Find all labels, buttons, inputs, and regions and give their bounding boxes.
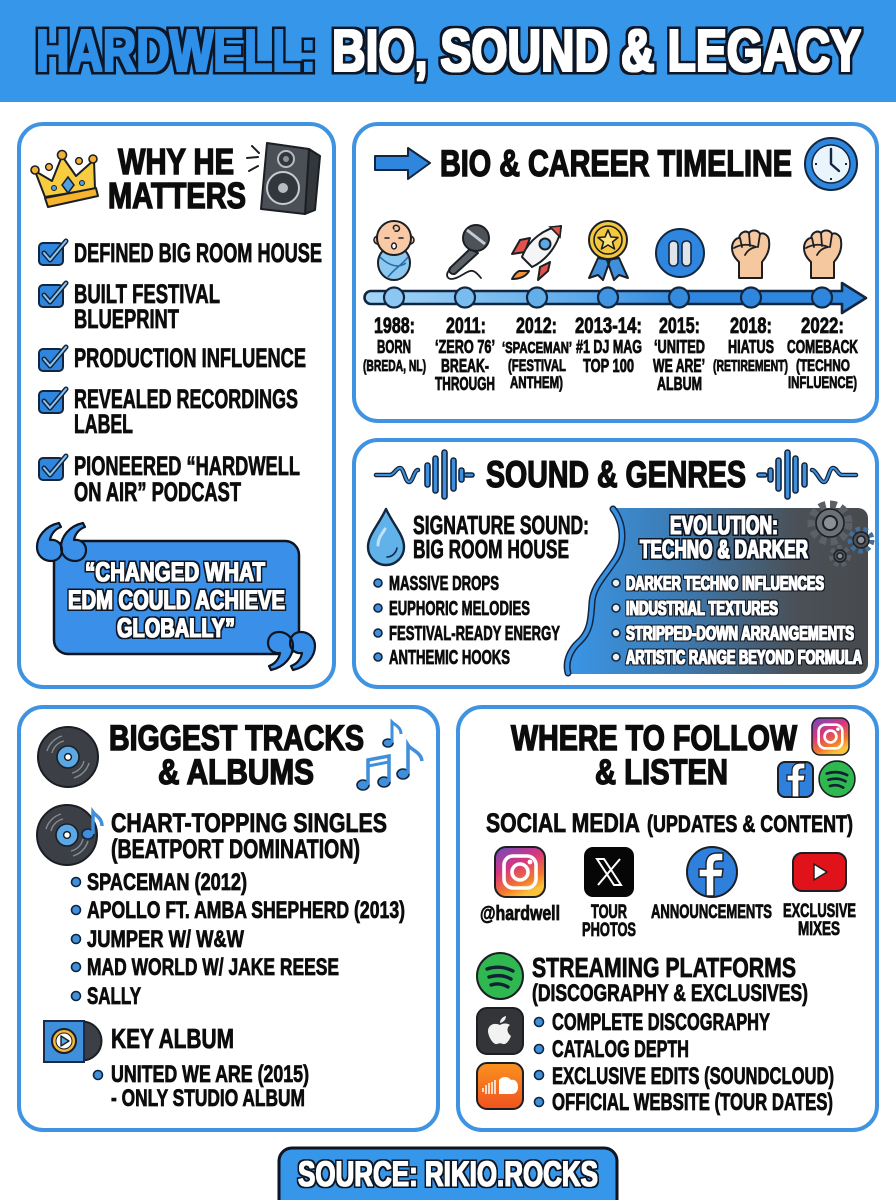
- item: built festival blueprint: BUILT FESTIVAL: [74, 279, 220, 309]
- album detail: UNITED WE ARE (2015): [111, 1061, 309, 1088]
- milestone: 2012: 2012:: [516, 313, 557, 338]
- icon: vinyl record: [38, 727, 98, 787]
- milestone: 2022: [787, 313, 858, 392]
- icon: left waveform: [376, 450, 474, 499]
- icon: award medal: [589, 221, 628, 280]
- social: facebook: ANNOUNCEMENTS: [651, 902, 772, 923]
- icon: music notes: [357, 722, 422, 790]
- milestone: 2015: WE ARE’: [653, 356, 705, 376]
- callout: quote: [37, 523, 315, 670]
- footer source badge: SOURCE: RIKIO.ROCKS: [298, 1155, 598, 1194]
- icon: vinyl with note: [37, 805, 102, 865]
- milestone: 2022: (TECHNO: [796, 356, 850, 375]
- milestone: 2013-14: [575, 313, 642, 376]
- subheading: social media: SOCIAL MEDIA: [486, 808, 640, 838]
- milestone: 1988: BORN: [377, 337, 411, 357]
- heading: where to follow: [511, 719, 797, 792]
- panel: where to follow and listen: [458, 707, 877, 1130]
- signature sound heading: SIGNATURE SOUND:: [413, 510, 589, 540]
- callout: quote: GLOBALLY”: [117, 613, 235, 643]
- item: pioneered hardwell on air podcast: PIONEERED “HARDWELL: [74, 451, 300, 481]
- item: production influence: [39, 343, 306, 373]
- icon: speaker: [247, 143, 320, 214]
- subheading: chart-topping singles: (BEATPORT DOMINATION): [111, 834, 360, 864]
- icon: small instagram: [812, 718, 849, 755]
- subheading: key album: KEY ALBUM: [111, 1023, 234, 1054]
- panel: biggest tracks and albums: [19, 707, 438, 1130]
- signature sound heading: [413, 510, 589, 564]
- album detail: [94, 1061, 309, 1112]
- icon: right waveform: [757, 450, 856, 499]
- milestone: 2012: ‘SPACEMAN’: [502, 340, 572, 357]
- social: youtube: EXCLUSIVE: [783, 901, 856, 922]
- signature sound list: FESTIVAL-READY ENERGY: [389, 623, 560, 645]
- icon: crown: [31, 150, 98, 207]
- milestone: 2013-14: 2013-14:: [575, 313, 642, 338]
- panel: why he matters: [19, 124, 334, 687]
- streaming list: COMPLETE DISCOGRAPHY: [552, 1009, 770, 1036]
- item: revealed recordings label: LABEL: [74, 409, 133, 439]
- milestone: 2013-14: TOP 100: [583, 356, 634, 376]
- milestone: 2018: [713, 313, 788, 375]
- milestone: 2015: [653, 313, 705, 394]
- footer source badge: [279, 1148, 617, 1200]
- social: x: PHOTOS: [582, 920, 636, 941]
- singles list: [72, 869, 405, 1010]
- milestone: 2012: (FESTIVAL: [508, 356, 566, 375]
- item: defined big room house: DEFINED BIG ROOM HOUSE: [74, 238, 322, 268]
- subheading: chart-topping singles: [111, 808, 387, 864]
- item: revealed recordings label: [39, 384, 298, 439]
- item: pioneered hardwell on air podcast: [39, 451, 300, 507]
- milestone: 1988: (BREDA, NL): [363, 358, 426, 375]
- social: instagram: [480, 847, 560, 925]
- milestone: 2015: ALBUM: [657, 374, 702, 394]
- milestone: 2015: ‘UNITED: [654, 337, 705, 357]
- icon: small facebook: [778, 762, 813, 797]
- social: youtube: MIXES: [798, 919, 840, 940]
- milestone: 2013-14: #1 DJ MAG: [576, 337, 642, 357]
- heading: biggest tracks: & ALBUMS: [158, 753, 314, 792]
- heading: why he matters: MATTERS: [108, 175, 246, 216]
- social: youtube: [783, 853, 856, 940]
- milestone: 2018: HIATUS: [728, 337, 774, 357]
- singles list: APOLLO FT. AMBA SHEPHERD (2013): [87, 897, 405, 924]
- social: facebook: [651, 847, 772, 923]
- signature sound list: ANTHEMIC HOOKS: [389, 647, 510, 669]
- icon: small spotify: [819, 761, 855, 797]
- milestone: 2022: INFLUENCE): [788, 373, 857, 392]
- album detail: - ONLY STUDIO ALBUM: [111, 1085, 305, 1112]
- title: HARDWELL:: [36, 18, 316, 84]
- milestone: 2011: [435, 313, 495, 394]
- social: instagram: @hardwell: [480, 903, 560, 925]
- milestone: 2018: 2018:: [730, 313, 772, 338]
- icon: pause: [656, 229, 704, 277]
- milestone: 2012: ANTHEM): [510, 373, 563, 392]
- panel: evolution dark gradient: EVOLUTION:: [670, 510, 778, 540]
- item: defined big room house: [39, 238, 322, 268]
- icon: album: [44, 1021, 102, 1062]
- item: built festival blueprint: BLUEPRINT: [74, 304, 179, 334]
- singles list: MAD WORLD W/ JAKE REESE: [87, 954, 339, 981]
- icon: soundcloud: [477, 1063, 523, 1109]
- heading: why he matters: WHY HE: [118, 141, 234, 182]
- icon: baby: [374, 221, 414, 280]
- icon: rocket: [512, 226, 561, 280]
- header banner: [0, 0, 896, 102]
- heading: where to follow: WHERE TO FOLLOW: [511, 719, 797, 758]
- heading: why he matters: [108, 141, 246, 216]
- milestone: 2018: (RETIREMENT): [713, 358, 788, 375]
- item: revealed recordings label: REVEALED RECORDINGS: [74, 384, 298, 414]
- icon: microphone: [447, 225, 489, 279]
- callout: quote: EDM COULD ACHIEVE: [68, 585, 285, 615]
- subheading: chart-topping singles: CHART-TOPPING SINGLES: [111, 808, 387, 838]
- icon: arrow: [375, 148, 430, 179]
- callout: quote: “CHANGED WHAT: [85, 557, 265, 587]
- icon: raised fist comeback: [804, 230, 841, 278]
- milestone: 2015: 2015:: [659, 313, 700, 338]
- signature sound list: [374, 573, 560, 669]
- timeline bar: [364, 283, 866, 313]
- panel: bio and career timeline: [354, 124, 877, 421]
- icon: apple: [477, 1008, 523, 1054]
- milestone: 2012: [502, 313, 572, 392]
- subheading: streaming platforms: [532, 952, 808, 1007]
- milestone: 2011: ‘ZERO 76’: [435, 337, 495, 357]
- icon: spotify: [477, 953, 523, 999]
- icon: gears: [813, 506, 871, 564]
- panel: evolution dark gradient: TECHNO & DARKER: [640, 534, 808, 564]
- singles list: SALLY: [87, 983, 141, 1010]
- icon: clock: [805, 138, 857, 190]
- milestone: 1988: [363, 313, 426, 375]
- milestone: 2011: THROUGH: [435, 374, 495, 394]
- milestone: 2011: 2011:: [446, 313, 486, 338]
- heading: where to follow: & LISTEN: [595, 753, 728, 792]
- social: x: TOUR: [591, 902, 627, 923]
- streaming list: [534, 1009, 834, 1116]
- panel: sound and genres: [354, 440, 877, 687]
- streaming list: CATALOG DEPTH: [552, 1036, 689, 1063]
- icon: raised fist hiatus: [732, 230, 769, 278]
- panel: evolution dark gradient: INDUSTRIAL TEXTURES: [626, 598, 778, 620]
- singles list: JUMPER W/ W&W: [87, 926, 244, 953]
- milestone: 2011: BREAK-: [441, 356, 489, 376]
- title: [36, 18, 861, 84]
- signature sound list: EUPHORIC MELODIES: [389, 598, 530, 620]
- milestone: 1988: 1988:: [374, 313, 415, 338]
- subheading: streaming platforms: STREAMING PLATFORMS: [532, 952, 796, 983]
- milestone: 2022: COMEBACK: [787, 337, 858, 357]
- heading: sound and genres: SOUND & GENRES: [486, 454, 746, 495]
- item: pioneered hardwell on air podcast: ON AIR” PODCAST: [74, 477, 241, 507]
- item: production influence: PRODUCTION INFLUENCE: [74, 343, 306, 373]
- milestone: 2022: 2022:: [801, 313, 844, 338]
- signature sound list: MASSIVE DROPS: [389, 573, 499, 595]
- heading: biggest tracks: [109, 719, 364, 792]
- social: x: [582, 847, 636, 941]
- checklist: [39, 238, 322, 507]
- signature sound heading: BIG ROOM HOUSE: [413, 534, 569, 564]
- heading: timeline: BIO & CAREER TIMELINE: [440, 143, 792, 184]
- panel: evolution dark gradient: [567, 506, 871, 674]
- singles list: SPACEMAN (2012): [87, 869, 247, 896]
- subheading: social media: [486, 808, 853, 838]
- item: built festival blueprint: [39, 279, 220, 334]
- icon: water drop: [368, 509, 404, 565]
- heading: biggest tracks: BIGGEST TRACKS: [109, 719, 364, 758]
